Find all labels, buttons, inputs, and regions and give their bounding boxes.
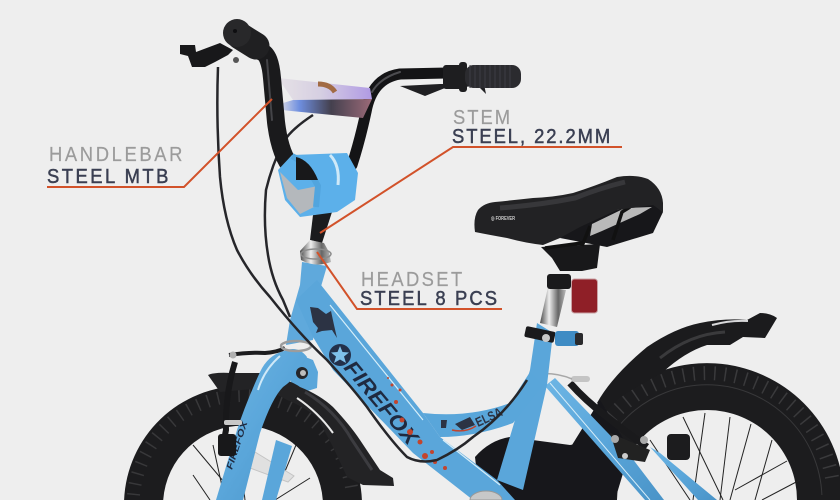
right grip — [443, 62, 521, 92]
seat post — [540, 287, 566, 327]
front fender — [208, 373, 394, 486]
fork right leg — [285, 355, 318, 398]
left brake lever — [180, 43, 239, 67]
FIREFOX fork text: FIREFOX — [224, 419, 250, 471]
seat clamp — [524, 326, 583, 346]
saddle — [474, 176, 663, 271]
ELSA decal: ELSA — [473, 404, 505, 430]
saddle rails — [545, 207, 630, 248]
front brake — [218, 341, 311, 456]
chain guard — [475, 437, 610, 500]
callout: handlebar — [47, 99, 272, 188]
value: STEEL, 22.2MM: STEEL, 22.2MM — [452, 126, 610, 148]
callout: stem — [320, 107, 622, 233]
front reflector — [250, 452, 294, 482]
saddle brand: ◎ FOREVER — [491, 216, 515, 222]
label: HANDLEBAR: HANDLEBAR — [49, 144, 182, 166]
leader line: handlebar — [47, 99, 272, 187]
handlebar left arm — [262, 52, 318, 188]
FIREFOX frame text: FIREFOX — [339, 356, 424, 451]
red splash decal — [387, 377, 447, 470]
leader line: headset — [317, 252, 502, 309]
value: STEEL MTB: STEEL MTB — [47, 166, 168, 188]
right brake lever — [400, 84, 486, 96]
label: STEM: STEM — [453, 107, 510, 129]
label: HEADSET: HEADSET — [361, 269, 462, 291]
seat tube — [497, 323, 553, 490]
rear brake arm — [537, 374, 690, 462]
handlebar pad — [278, 78, 372, 118]
leader line: stem — [320, 147, 622, 233]
post collar — [547, 274, 571, 289]
rear fender — [572, 313, 777, 500]
front wheel — [124, 386, 362, 500]
headset — [300, 240, 331, 265]
callout: headset — [317, 252, 502, 310]
head tube — [286, 262, 327, 345]
top tube — [423, 372, 543, 437]
handlebar right arm — [352, 72, 447, 165]
rear reflector — [572, 279, 598, 313]
stem light pad — [278, 153, 358, 217]
horse decal — [310, 307, 337, 338]
rear frame stays — [545, 378, 717, 500]
rear wheel — [570, 363, 840, 500]
saddle top — [474, 176, 663, 245]
star badge — [329, 344, 351, 366]
saddle underside — [560, 204, 663, 247]
left grip — [223, 19, 256, 47]
down tube — [296, 280, 515, 500]
saddle clamp — [541, 244, 600, 271]
ELSA decal — [441, 404, 505, 431]
value: STEEL 8 PCS: STEEL 8 PCS — [360, 288, 497, 310]
brake and shift cables — [217, 67, 527, 461]
fork left leg — [216, 349, 307, 500]
stem — [310, 212, 332, 243]
bottom bracket — [470, 491, 502, 500]
main frame — [286, 262, 553, 500]
